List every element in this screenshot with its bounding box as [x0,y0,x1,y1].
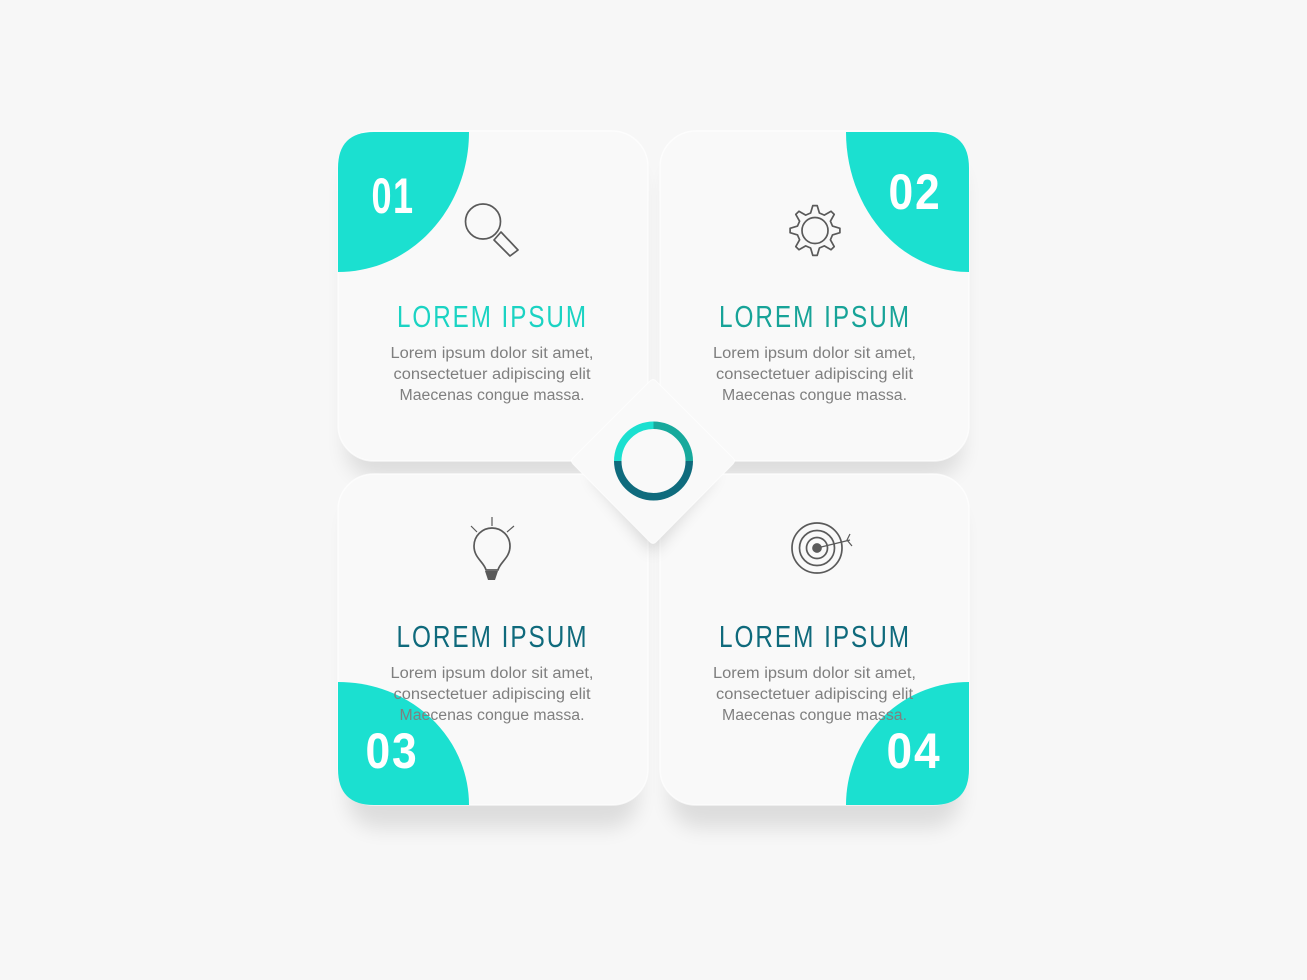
text block 04 [713,665,916,724]
text block 01: Lorem ipsum dolor sit amet, [390,345,594,362]
text block 03: Maecenas congue massa. [400,707,584,724]
text block 02: consectetuer adipiscing elit [716,366,914,383]
text block 02: Lorem ipsum dolor sit amet, [713,345,916,362]
heading 04: LOREM IPSUM [719,619,911,654]
panel: card 04 [660,474,969,805]
text block 01: consectetuer adipiscing elit [394,366,591,383]
badge shape 03 [338,682,469,805]
text block 02: Maecenas congue massa. [722,387,907,404]
heading 01: LOREM IPSUM [397,299,588,334]
center diamond [572,380,734,544]
panel: card 03 [338,474,648,805]
text block 02 [713,345,916,404]
badge shape 04 [846,682,969,805]
number 02: 02 [888,164,942,220]
heading 02: LOREM IPSUM [719,299,911,334]
badge shape 01 [338,132,469,272]
text block 03 [390,665,594,724]
text block 04: Lorem ipsum dolor sit amet, [713,665,916,682]
panel: card 01 [338,131,648,461]
text block 01 [390,345,594,404]
icon: magnifying glass [466,204,518,256]
text block 03: Lorem ipsum dolor sit amet, [390,665,594,682]
text block 04: consectetuer adipiscing elit [716,686,914,703]
icon: light bulb [471,517,514,580]
text block 04: Maecenas congue massa. [722,707,907,724]
number 04: 04 [886,723,942,779]
badge shape 02 [846,132,969,272]
icon: target with arrow [792,523,852,573]
heading 03: LOREM IPSUM [396,619,588,654]
panel: card 02 [660,131,969,461]
text block 01: Maecenas congue massa. [400,387,584,404]
number 01: 01 [372,168,414,224]
icon: gear [790,206,840,255]
text block 03: consectetuer adipiscing elit [394,686,591,703]
number 03: 03 [366,723,418,779]
ring [618,425,689,497]
